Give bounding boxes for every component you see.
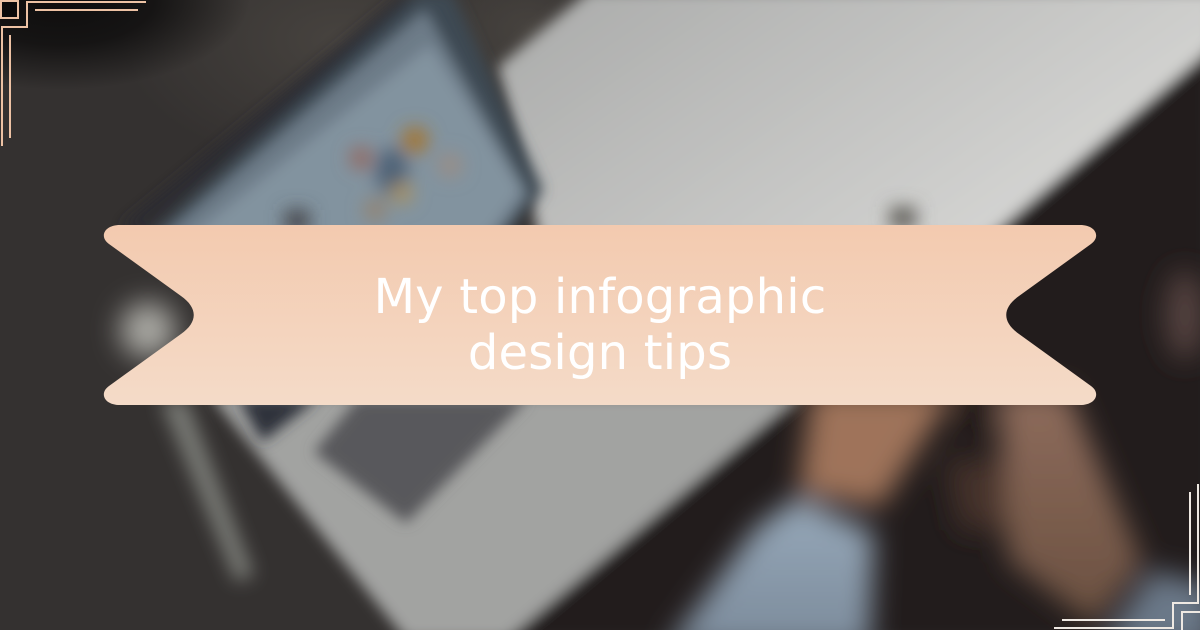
title: My top infographic xyxy=(374,269,826,325)
title xyxy=(374,269,826,381)
laptop and keyboard xyxy=(120,0,543,523)
corner ornament: bottom right xyxy=(1054,484,1200,630)
banner xyxy=(104,225,1096,405)
corner ornament: top left xyxy=(1,1,146,146)
title: design tips xyxy=(468,325,732,381)
